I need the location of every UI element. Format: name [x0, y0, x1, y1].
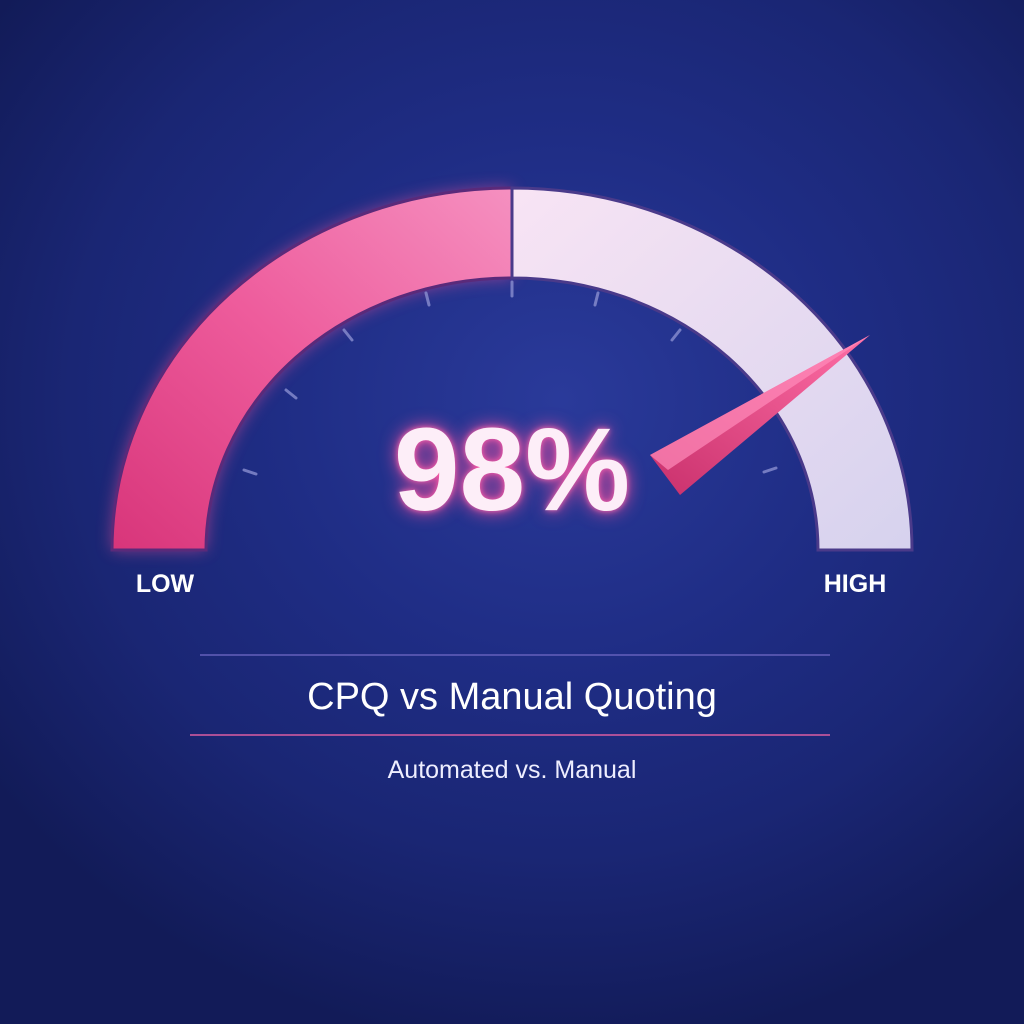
ticks: [244, 282, 776, 474]
label LOW: LOW: [136, 570, 194, 598]
label HIGH: HIGH: [824, 570, 886, 598]
subtitle: Automated vs. Manual: [388, 756, 636, 784]
dividers: [200, 654, 830, 656]
value 98%: 98%: [394, 404, 630, 536]
glow behind arc: [112, 188, 512, 550]
arc: high half: [512, 188, 912, 550]
needle: [650, 335, 870, 495]
title: CPQ vs Manual Quoting: [307, 676, 717, 718]
arc: low half: [112, 188, 512, 550]
